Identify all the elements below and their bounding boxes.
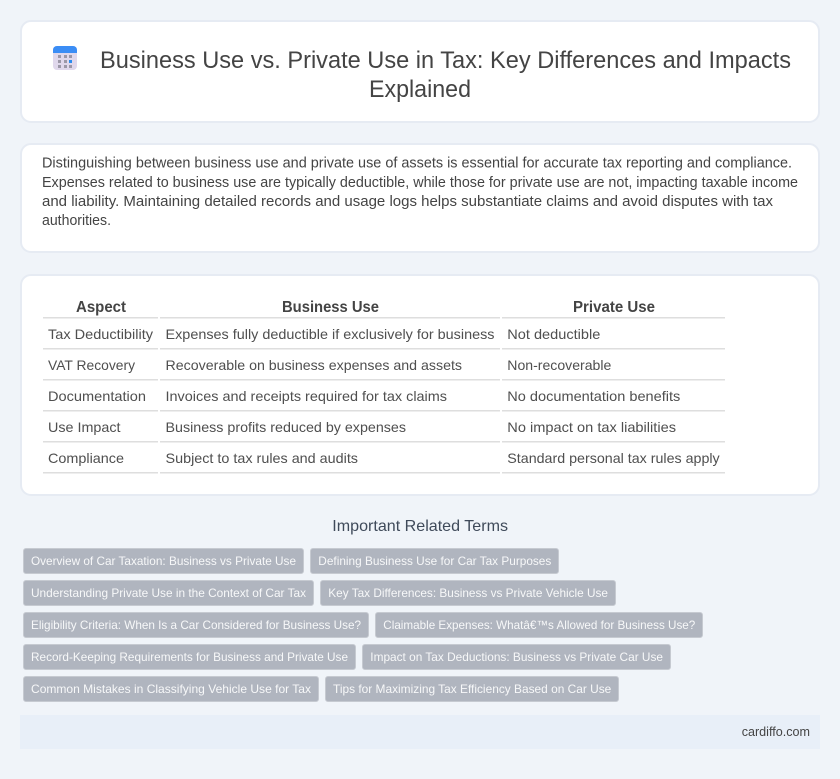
chip: Common Mistakes in Classifying Vehicle Use for Tax [31,682,311,696]
row: compliance [48,450,720,466]
related terms chips [24,548,702,702]
row: VAT recovery: Recoverable on business expenses and assets [166,357,462,373]
chip [376,612,702,638]
row: VAT recovery: VAT Recovery [48,357,135,373]
chip [320,580,616,606]
panel: header [21,21,819,122]
row: documentation: No documentation benefits [507,388,680,404]
chip: Overview of Car Taxation: Business vs Private Use [31,554,296,568]
intro text: and liability. Maintaining detailed records and usage logs helps substantiate claims and avoid disputes with tax [42,194,774,210]
chip: Record-Keeping Requirements for Business and Private Use [31,650,348,664]
chip: Key Tax Differences: Business vs Private Vehicle Use [328,586,608,600]
panel: comparison table [21,275,819,495]
row: tax deductibility: Expenses fully deductible if exclusively for business [166,326,494,342]
row: use impact: Use Impact [48,419,121,435]
chip [326,676,618,702]
table header: Aspect [76,299,127,316]
chip: Understanding Private Use in the Context of Car Tax [31,586,306,600]
icon: calendar [53,46,77,70]
row: documentation: Invoices and receipts required for tax claims [166,388,447,404]
intro text: authorities. [42,213,111,229]
row: VAT recovery [48,357,612,373]
chip [24,644,356,670]
chip: Tips for Maximizing Tax Efficiency Based on Car Use [333,682,612,696]
table header [76,299,655,316]
row: compliance: Standard personal tax rules apply [507,450,720,466]
table header: Private Use [573,299,655,316]
intro text: Distinguishing between business use and private use of assets is essential for accurate tax reporting and compliance. [42,156,792,172]
panel: introduction paragraph [21,144,819,252]
intro text [42,156,798,229]
chip [362,644,670,670]
title: Explained [369,76,471,103]
table header: Business Use [282,299,379,316]
chip: Claimable Expenses: Whatâ€™s Allowed for Business Use? [383,618,696,632]
row: use impact: Business profits reduced by expenses [166,419,406,435]
title: Business Use vs. Private Use in Tax: Key Differences and Impacts [100,47,791,74]
row: use impact: No impact on tax liabilities [507,419,676,435]
row: compliance: Compliance [48,450,124,466]
row: documentation [48,388,680,404]
chip: Eligibility Criteria: When Is a Car Considered for Business Use? [31,618,361,632]
chip [24,548,304,574]
footer text: cardiffo.com [742,724,810,739]
row: tax deductibility: Tax Deductibility [48,326,153,342]
row: use impact [48,419,676,435]
chip [24,676,318,702]
heading: important related terms: Important Related Terms [332,518,508,535]
chip: Defining Business Use for Car Tax Purposes [318,554,551,568]
row: tax deductibility: Not deductible [507,326,601,342]
row: VAT recovery: Non-recoverable [507,357,612,373]
row: compliance: Subject to tax rules and audits [166,450,358,466]
chip [24,580,314,606]
footer [20,715,820,749]
chip: Impact on Tax Deductions: Business vs Private Car Use [370,650,663,664]
row: tax deductibility [48,326,601,342]
intro text: Expenses related to business use are typically deductible, while those for private use are not, impacting taxable income [42,175,798,191]
title [100,47,791,103]
chip [310,548,558,574]
row: documentation: Documentation [48,388,146,404]
chip [24,612,368,638]
